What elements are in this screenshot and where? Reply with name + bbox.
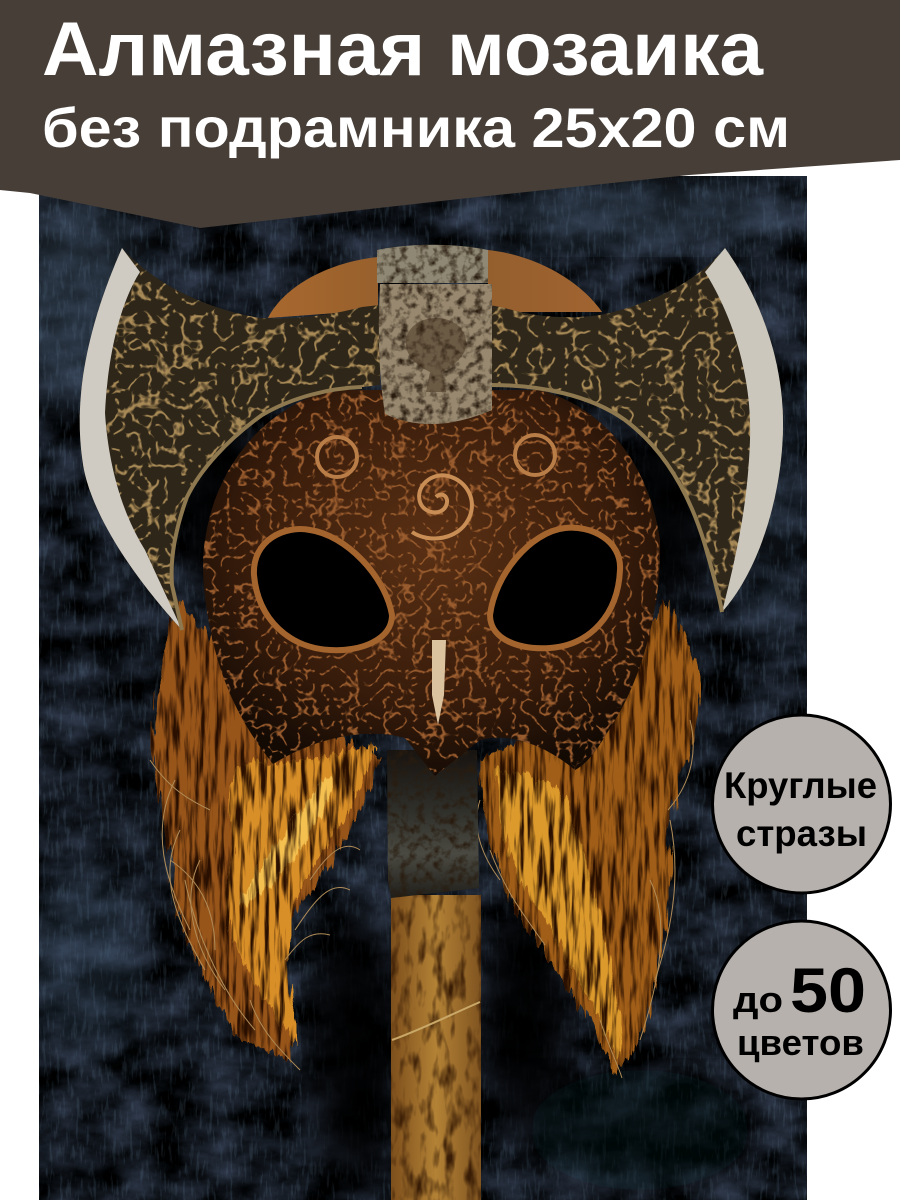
hair: left beard [150,600,382,1070]
wood cut [392,1002,480,1040]
label: do: до [733,979,783,1020]
block front [379,284,492,424]
hair: right beard [477,600,700,1078]
helmet dome [268,250,602,318]
badge circle [712,715,890,893]
inner rim [172,387,362,630]
inner rim [490,385,722,612]
loose strands [150,760,360,1070]
bright core [227,745,375,1045]
bright core [495,770,620,1060]
right axe blade [490,248,783,612]
badge: up to 50 colours [712,921,890,1099]
handle wood [391,895,481,1200]
forehead spiral [412,475,472,538]
badge text line 1: Круглые [724,765,877,806]
banner shape [0,0,900,228]
fur background [10,176,807,1200]
left axe blade [80,248,380,630]
left scroll [317,437,357,477]
block top [377,245,488,283]
label: colours: цветов [737,1022,864,1063]
axe handle [387,750,481,1200]
title line 2: без подрамника 25х20 см [42,96,790,159]
mask body [203,390,660,776]
blade body [490,248,783,612]
silver edge [80,248,182,630]
face mask [203,390,660,776]
title line 1: Алмазная мозаика [42,7,764,92]
right scroll [515,435,555,475]
illustration: viking axe mask on fur [10,176,807,1200]
right eye [490,528,620,648]
title banner [0,0,900,228]
badge: round rhinestones [712,715,890,893]
loose strands [477,720,693,1078]
outer sparse hair [480,600,700,1075]
central axe block [377,245,492,424]
number 50: 50 [790,956,866,1026]
outer sparse hair [152,600,382,1062]
tree emblem [406,318,466,392]
badge circle [712,921,890,1099]
silver edge [705,248,783,612]
highlight [238,775,332,905]
handle leather wrap [387,750,479,898]
nose guard [432,640,446,725]
badge text line 2: стразы [736,813,867,854]
blade body [80,248,380,630]
left eye [254,529,392,650]
